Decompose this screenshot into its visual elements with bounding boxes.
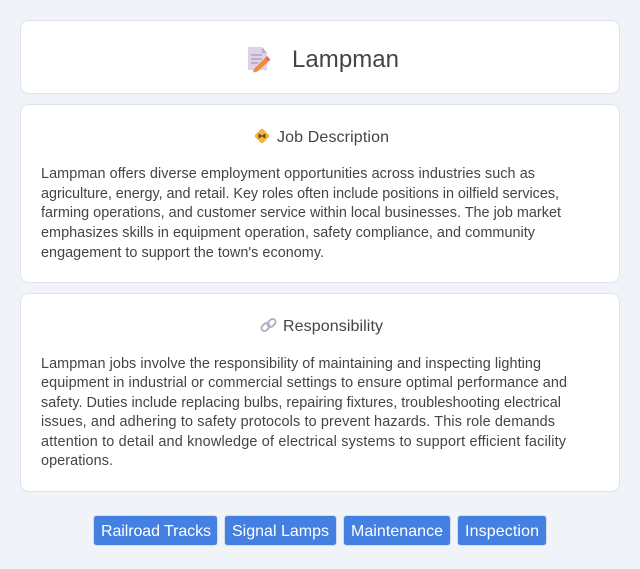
text block: responsibility: safety. Duties include replacing bulbs, repairing fixtures, troubleshooting electrical [41,395,561,411]
text block: responsibility: Lampman jobs involve the responsibility of maintaining and inspecting lighting [41,356,541,372]
text block: job description: farming operations, and customer service within local businesses. The job market [41,205,561,221]
text block: responsibility: issues, and adhering to safety protocols to prevent hazards. This role demands [41,414,555,430]
tag: Inspection: Inspection [465,523,539,540]
text block: job description: agriculture, energy, and retail. Key roles often include positions in oilfield services, [41,186,559,202]
icon: chain link [260,318,277,332]
text block: responsibility [41,356,567,469]
title: Lampman [292,46,399,73]
text block: responsibility: attention to detail and knowledge of electrical systems to support efficient facility [41,434,567,450]
text block: job description [41,166,561,261]
tag: Maintenance [344,516,450,546]
tag: Signal Lamps: Signal Lamps [232,523,329,540]
panel: title card [20,20,620,94]
text block: job description: emphasizes skills in equipment operation, safety compliance, and community [41,225,536,241]
text block: responsibility: operations. [41,453,113,469]
heading: responsibility: Responsibility [283,318,383,335]
text block: job description: engagement to support the town's economy. [41,245,324,261]
tag: Inspection [458,516,546,546]
heading: job description: Job Description [277,129,389,146]
text block: responsibility: equipment in industrial or commercial settings to ensure optimal performance and [41,375,567,391]
panel: job description [20,104,620,282]
tag: Maintenance: Maintenance [351,523,443,540]
text block: job description: Lampman offers diverse employment opportunities across industries such as [41,166,535,182]
icon: document with pencil [248,47,270,72]
panel: responsibility [20,294,620,492]
tag: Railroad Tracks: Railroad Tracks [101,523,211,540]
tag: Railroad Tracks [94,516,218,546]
tag: Signal Lamps [224,516,336,546]
icon: road sign [254,128,270,144]
